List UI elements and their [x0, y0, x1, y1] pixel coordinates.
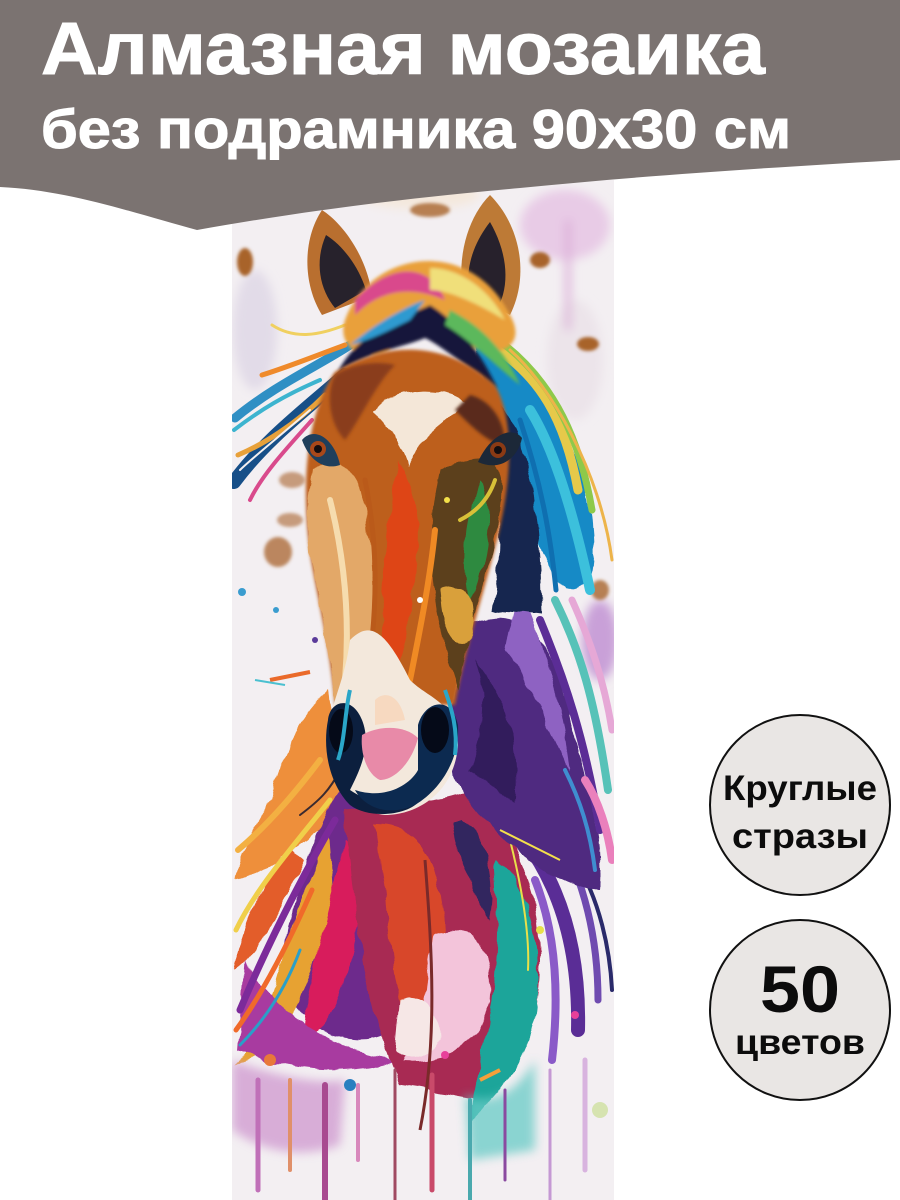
badge: round rhinestones: Круглые: [723, 769, 877, 808]
title line 2: без подрамника 90х30 см: [41, 98, 791, 160]
top forelock: [338, 261, 520, 388]
badge: 50 colours: цветов: [735, 1023, 865, 1062]
ears: [307, 195, 520, 315]
purple mane lower right: [452, 590, 601, 890]
badge: 50 colours: [710, 920, 890, 1100]
horse face: [306, 350, 509, 705]
header banner: [0, 0, 900, 230]
brown paint splatters: [237, 203, 609, 600]
painting background: [232, 180, 614, 1200]
badge: 50 colours: 50: [760, 952, 840, 1026]
eyes: [302, 432, 522, 466]
right mane lower strands: [510, 830, 612, 1060]
painting: colourful horse: [232, 180, 618, 1200]
face colour: orange centre stripe: [382, 460, 420, 661]
badge: round rhinestones: [710, 715, 890, 895]
muzzle: [326, 630, 458, 815]
face colour: dark right cheek: [432, 458, 502, 690]
left upper mane strands: [234, 325, 350, 500]
forehead colour: [330, 363, 395, 440]
right blue mane: [470, 330, 593, 615]
bottom drips: [232, 1060, 585, 1200]
colour splatters: [238, 497, 608, 1130]
background paint washes: [233, 181, 618, 680]
title: [41, 7, 791, 160]
title line 1: Алмазная мозаика: [41, 7, 766, 90]
face highlight: left cheek: [309, 464, 373, 705]
badge: round rhinestones: стразы: [732, 817, 868, 856]
lower left mane: [233, 690, 395, 1070]
face blaze: [372, 390, 465, 465]
neck and chest: [345, 790, 540, 1120]
